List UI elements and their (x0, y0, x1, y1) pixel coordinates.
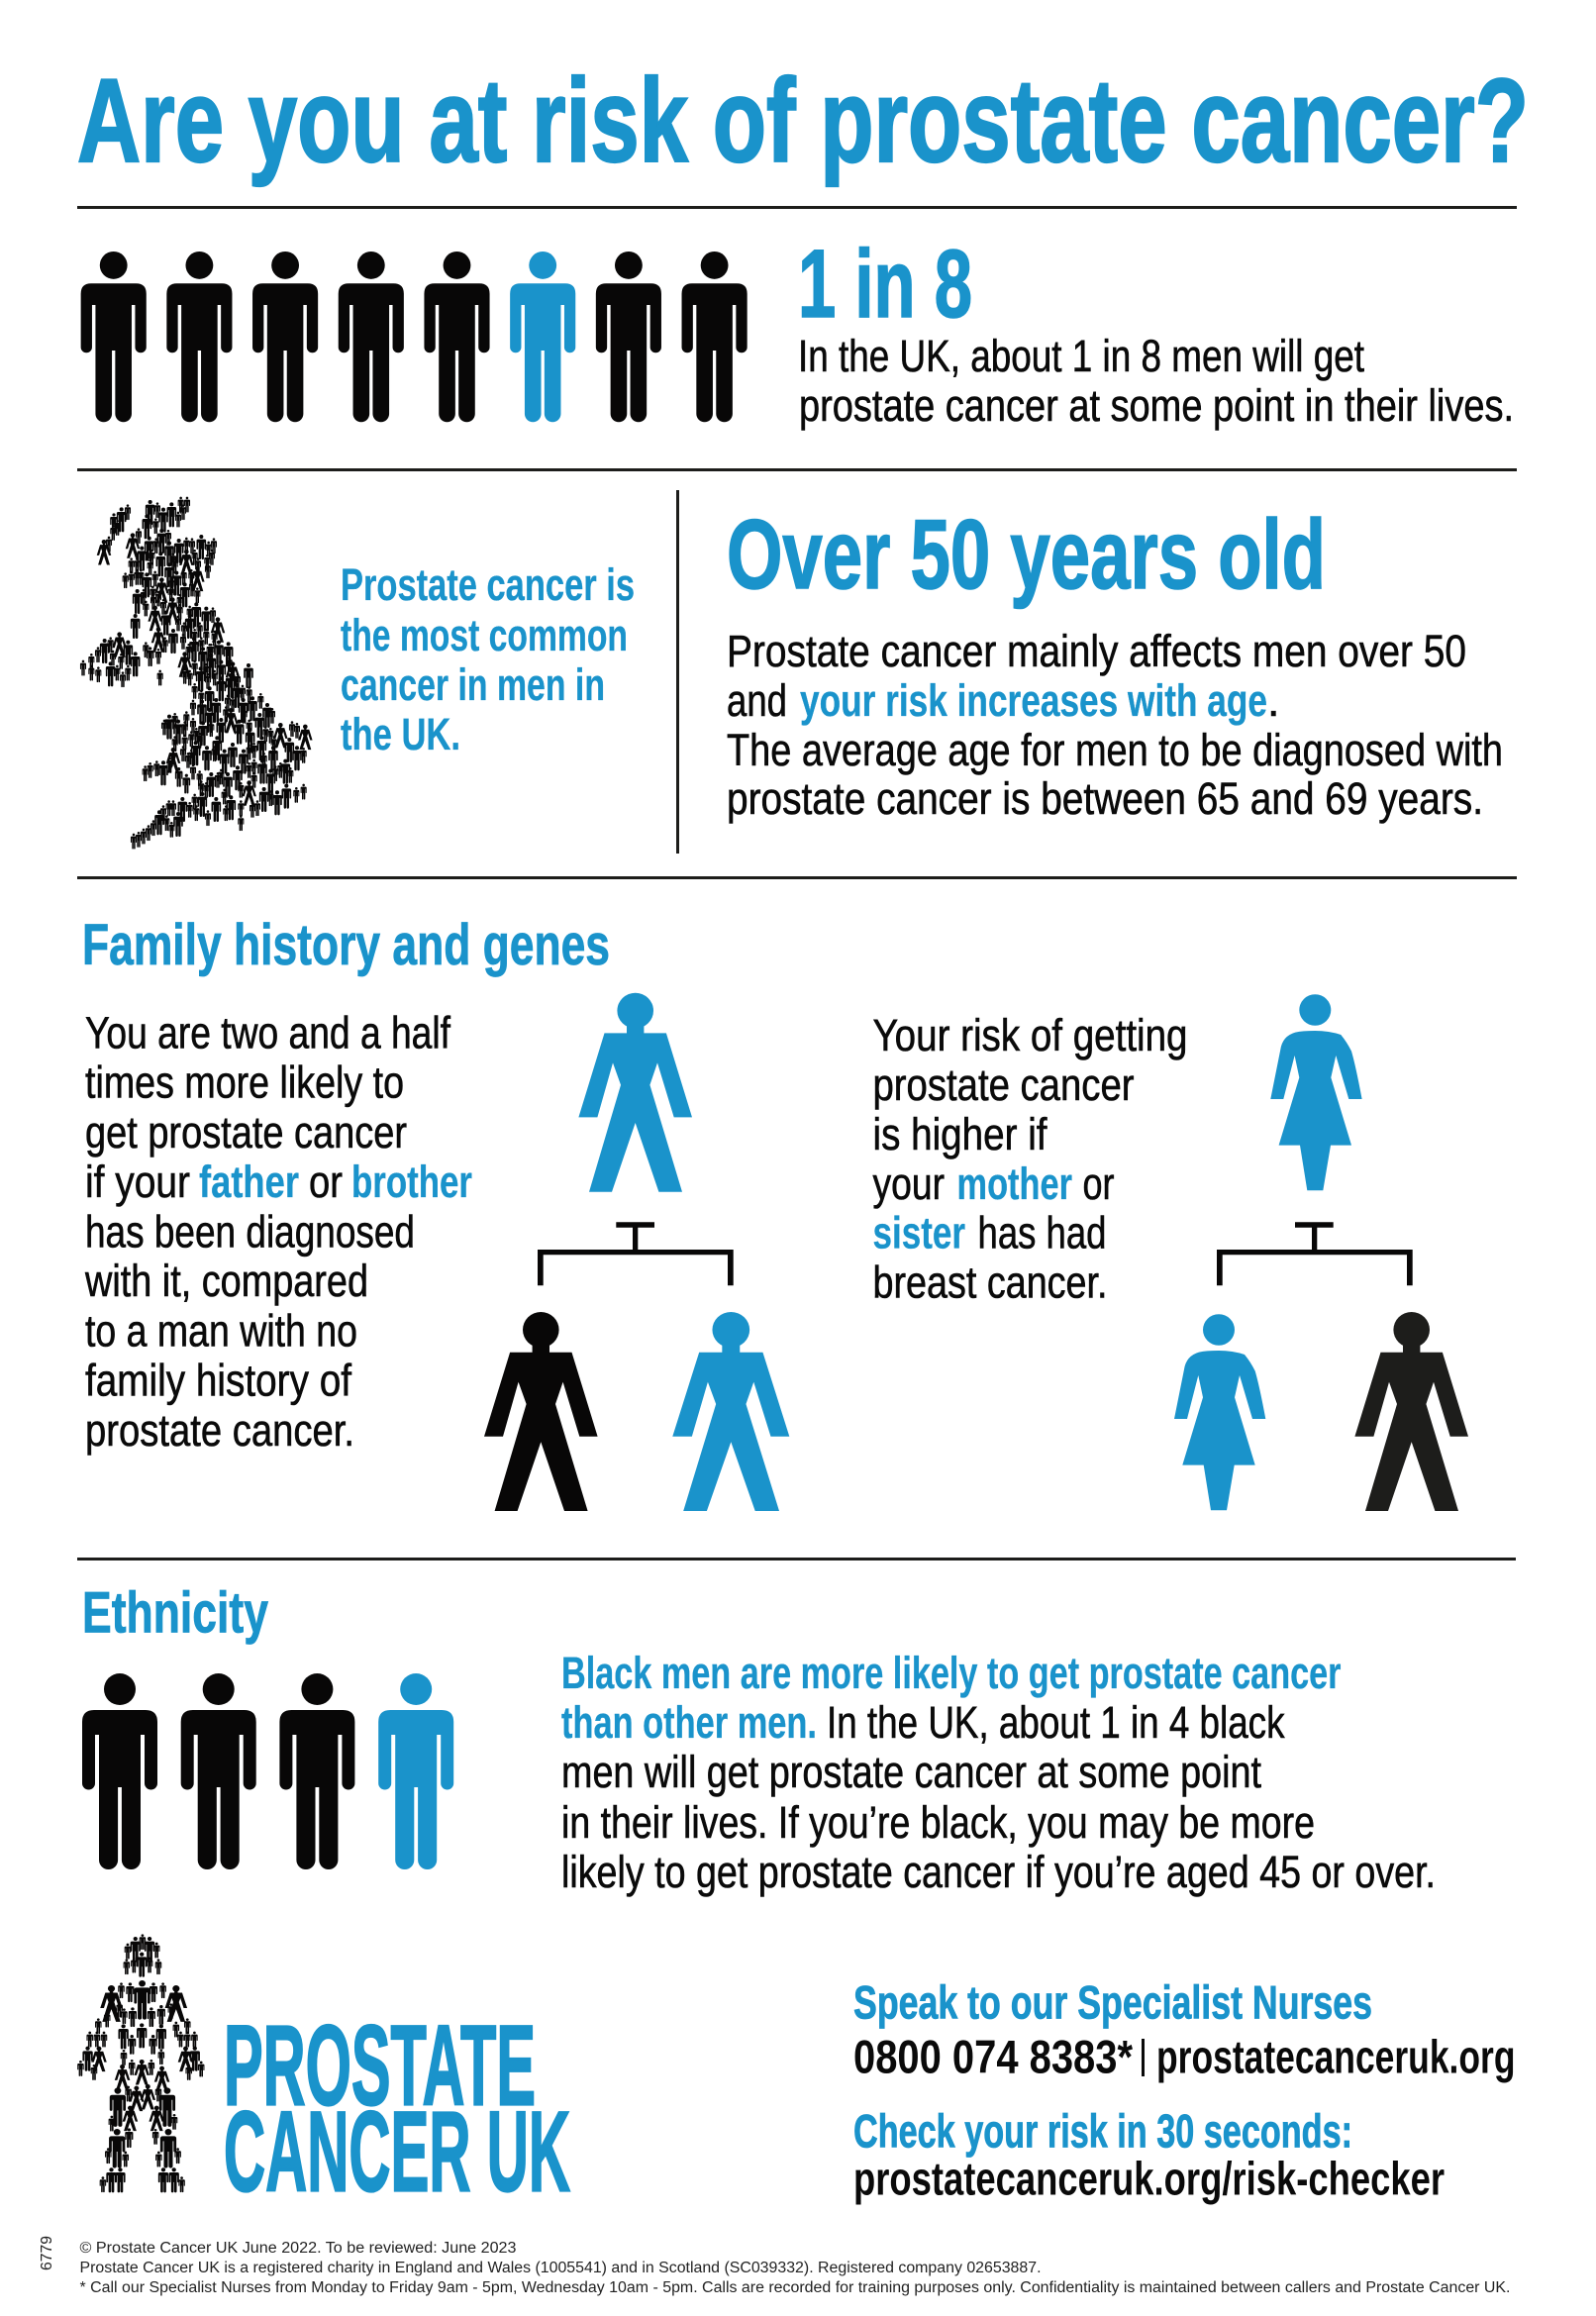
logo wordmark (224, 2002, 570, 2216)
ethnicity text: Black men are more likely to get prostate cancer (561, 1648, 1341, 1698)
mother or sister text: Your risk of getting (873, 1010, 1188, 1060)
phone and website: 0800 074 8383* (853, 2030, 1134, 2083)
mother or sister text: breast cancer. (873, 1258, 1107, 1307)
icon: man (1354, 1312, 1468, 1511)
icon: father (578, 993, 692, 1192)
connector (1217, 1222, 1413, 1285)
father or brother text: father (199, 1157, 299, 1207)
mother or sister text: or (1083, 1158, 1115, 1209)
icon: mother (1270, 994, 1362, 1190)
panel: over 50 years old (727, 499, 1503, 824)
family tree: mother and children (1174, 994, 1468, 1511)
1 in 8 description (798, 331, 1514, 431)
most common cancer statement: the UK. (341, 709, 460, 759)
icon: figure made of people (77, 1934, 204, 2192)
father or brother text: with it, compared (84, 1256, 368, 1306)
father or brother text: prostate cancer. (85, 1405, 354, 1456)
family history heading: Family history and genes (82, 913, 610, 977)
father or brother text (84, 1008, 472, 1456)
1 in 8 description: In the UK, about 1 in 8 men will get (798, 331, 1364, 381)
age risk description: your risk increases with age (800, 675, 1267, 726)
icon: brother (672, 1312, 789, 1511)
risk checker heading: Check your risk in 30 seconds: (853, 2105, 1352, 2157)
footer small print (79, 2240, 1511, 2296)
father or brother text: brother (351, 1157, 472, 1207)
phone and website (853, 2030, 1515, 2083)
mother or sister text: has had (978, 1208, 1107, 1258)
connector (538, 1222, 734, 1285)
ethnicity heading: Ethnicity (82, 1580, 268, 1646)
logo (77, 1934, 570, 2216)
logo wordmark: CANCER UK (224, 2089, 570, 2216)
father or brother text: family history of (85, 1355, 351, 1406)
age risk description: . (1267, 675, 1280, 726)
over 50 heading: Over 50 years old (727, 499, 1326, 609)
mother or sister text: is higher if (873, 1109, 1047, 1159)
row of eight men, one highlighted (81, 252, 748, 422)
print code: 6779 (39, 2236, 55, 2270)
panel: family history and genes (82, 913, 1468, 1511)
ethnicity text (561, 1648, 1436, 1897)
father or brother text: has been diagnosed (85, 1206, 415, 1258)
ethnicity text: than other men. (561, 1697, 817, 1748)
mother or sister text: prostate cancer (873, 1059, 1135, 1110)
father or brother text: times more likely to (85, 1057, 404, 1107)
age risk description (727, 626, 1503, 824)
father or brother text: get prostate cancer (85, 1107, 407, 1158)
contact details (853, 1976, 1515, 2204)
icon: son (484, 1312, 598, 1511)
age risk description: and (727, 675, 787, 726)
footer small print: * Call our Specialist Nurses from Monday to Friday 9am - 5pm, Wednesday 10am - 5pm. Calls are recorded for training purposes only. Confidentiality is maintained between callers and Prostate Cancer UK. (79, 2279, 1511, 2296)
ethnicity text: In the UK, about 1 in 4 black (827, 1697, 1285, 1748)
most common cancer statement: Prostate cancer is (341, 559, 635, 610)
mother or sister text: mother (956, 1158, 1072, 1209)
logo wordmark: PROSTATE (224, 2002, 536, 2129)
family tree: father and sons (484, 993, 789, 1511)
footer small print: Prostate Cancer UK is a registered charity in England and Wales (1005541) and in Scotland (SC039332). Registered company 02653887. (79, 2260, 1042, 2276)
father or brother text: You are two and a half (85, 1008, 450, 1057)
age risk description: Prostate cancer mainly affects men over 50 (727, 626, 1466, 676)
row of four men, one highlighted (82, 1673, 453, 1869)
most common cancer statement: cancer in men in (341, 659, 605, 710)
UK map made of people (80, 497, 313, 849)
ethnicity text: likely to get prostate cancer if you’re aged 45 or over. (561, 1847, 1436, 1897)
footer small print: © Prostate Cancer UK June 2022. To be reviewed: June 2023 (79, 2240, 517, 2257)
1 in 8 heading: 1 in 8 (798, 230, 972, 338)
mother or sister text: sister (873, 1208, 965, 1258)
panel: ethnicity (82, 1580, 1436, 1897)
panel: 1 in 8 (81, 230, 1514, 431)
father or brother text: to a man with no (85, 1305, 357, 1357)
father or brother text: or (309, 1157, 343, 1207)
ethnicity text: men will get prostate cancer at some point (561, 1747, 1261, 1797)
ethnicity text: in their lives. If you’re black, you may be more (561, 1797, 1315, 1848)
panel: most common cancer (80, 497, 635, 849)
age risk description: prostate cancer is between 65 and 69 years. (727, 773, 1483, 824)
most common cancer statement: the most common (341, 610, 628, 660)
father or brother text: if your (85, 1157, 190, 1207)
mother or sister text: your (873, 1158, 945, 1209)
specialist nurses line: Speak to our Specialist Nurses (853, 1976, 1372, 2028)
mother or sister text (873, 1010, 1188, 1307)
most common cancer statement (341, 559, 635, 759)
icon: sister (1174, 1314, 1265, 1510)
risk checker url: prostatecanceruk.org/risk-checker (853, 2153, 1445, 2204)
